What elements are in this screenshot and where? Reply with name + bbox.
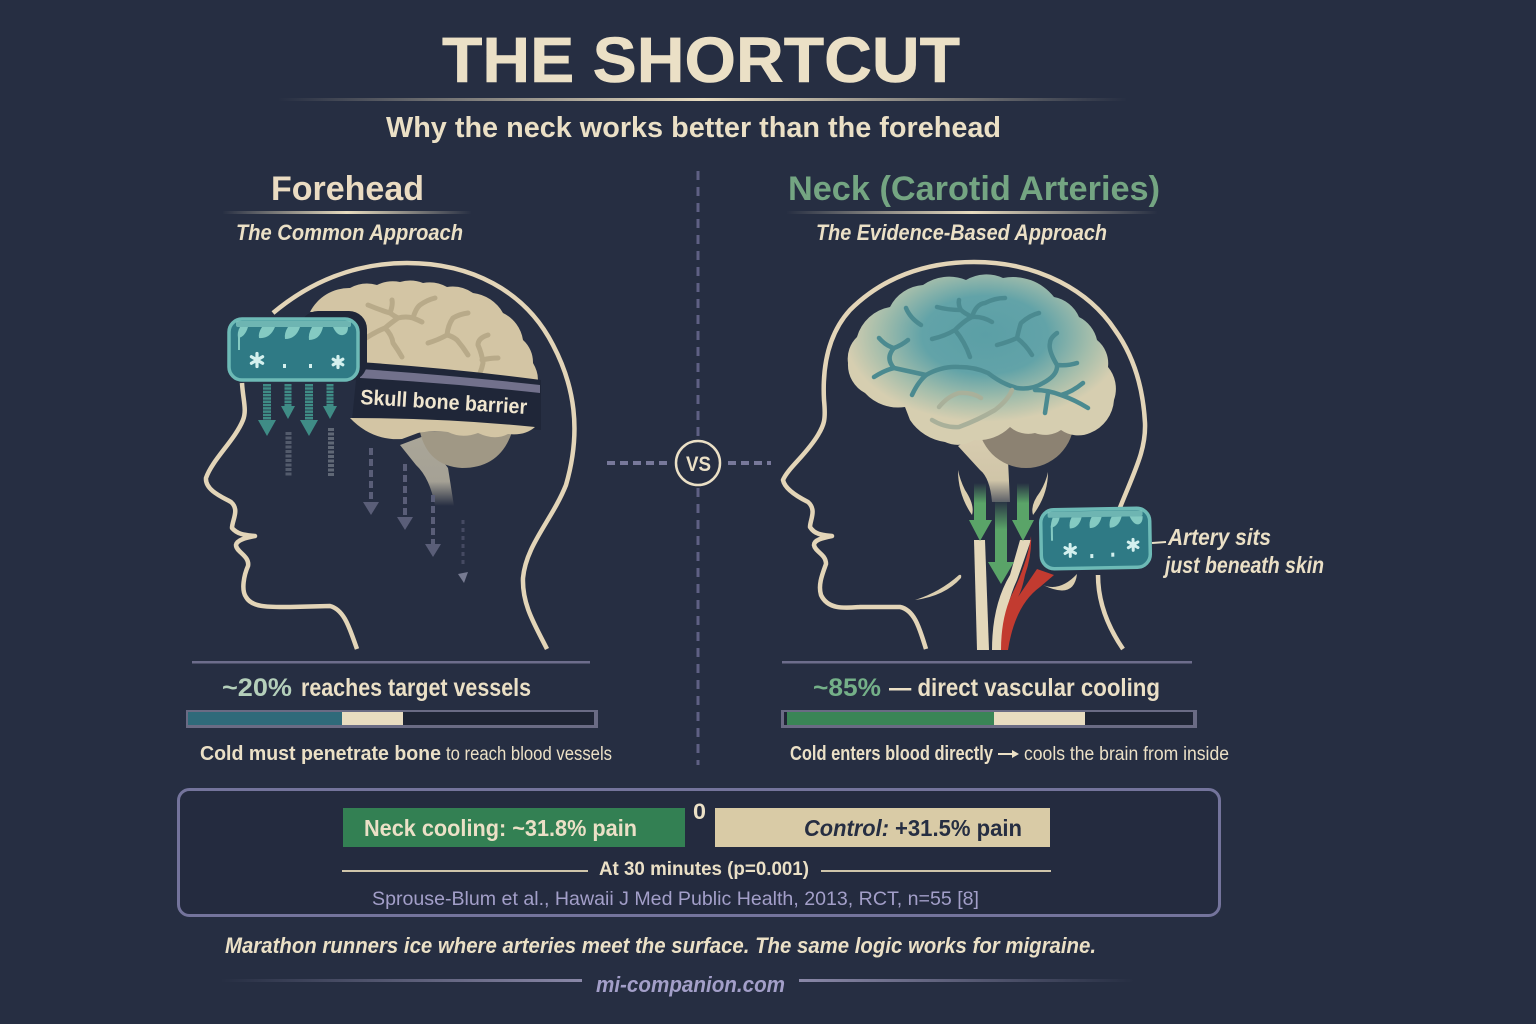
- result bar: control: [715, 808, 1050, 847]
- footer: [220, 972, 1135, 997]
- skull bone barrier: [350, 362, 541, 439]
- footer: mi-companion.com: [596, 972, 785, 997]
- note: neck: [790, 743, 1229, 765]
- zero marker: 0: [693, 799, 706, 824]
- ice pack: [1041, 508, 1151, 569]
- heading: forehead: Forehead: [271, 170, 424, 208]
- note: neck: cools the brain from inside: [1024, 744, 1229, 765]
- heading: neck: Neck (Carotid Arteries): [788, 170, 1160, 208]
- cerebellum and stem: [958, 372, 1074, 502]
- note: forehead: [200, 743, 612, 765]
- result bar: control: +31.5% pain: [895, 815, 1022, 841]
- carotid vessels: [974, 536, 1054, 650]
- subheading: evidence-based approach: The Evidence-Based Approach: [816, 220, 1107, 245]
- cooled brain: [848, 274, 1116, 445]
- stat: 85 percent: [782, 661, 1192, 702]
- stat: 85 percent: — direct vascular cooling: [889, 674, 1160, 702]
- artery callout: Artery sits: [1167, 524, 1271, 550]
- shoulder and jaw curves: [915, 470, 1077, 600]
- stat: 20 percent: reaches target vessels: [301, 674, 531, 702]
- progress bar: 85 percent: [781, 710, 1197, 728]
- subheading: common approach: The Common Approach: [236, 220, 463, 245]
- stat: 85 percent: ~85%: [813, 674, 881, 702]
- head outline: [783, 262, 1145, 649]
- head outline: [206, 263, 574, 649]
- note: forehead: to reach blood vessels: [446, 744, 612, 765]
- result bar: control: Control:: [804, 815, 889, 841]
- note: neck: Cold enters blood directly: [790, 743, 994, 765]
- closing statement: Marathon runners ice where arteries meet the surface. The same logic works for migraine.: [225, 933, 1096, 958]
- skull bone barrier: Skull bone barrier: [360, 386, 528, 419]
- result bar: neck cooling: Neck cooling: ~31.8% pain: [364, 815, 637, 841]
- faded cold trails: [288, 428, 331, 476]
- vs divider: VS: [686, 453, 711, 476]
- artery callout: just beneath skin: [1162, 552, 1324, 578]
- result bar: neck cooling: [343, 808, 685, 847]
- green cooling arrows: [969, 483, 1034, 584]
- blocked dashed arrows: [363, 448, 468, 583]
- artery callout: [1152, 524, 1324, 578]
- brain: [310, 281, 538, 385]
- vs divider: [607, 171, 771, 765]
- illustration: head with forehead cooling: [206, 263, 574, 649]
- illustration: head with neck cooling: [783, 262, 1324, 650]
- ice pack: [229, 311, 367, 381]
- panel: forehead: [186, 170, 612, 765]
- panel: trial results: [178, 790, 1220, 916]
- brain folds: [874, 298, 1088, 413]
- citation: Sprouse-Blum et al., Hawaii J Med Public Health, 2013, RCT, n=55 [8]: [372, 888, 979, 910]
- stat: 20 percent: [192, 661, 590, 702]
- note: forehead: Cold must penetrate bone: [200, 743, 441, 765]
- panel: neck: [781, 170, 1324, 765]
- brain folds: [363, 298, 498, 373]
- title: THE SHORTCUT: [442, 24, 960, 96]
- progress bar: 20 percent: [186, 710, 598, 728]
- timepoint label: At 30 minutes (p=0.001): [599, 859, 809, 880]
- subtitle: Why the neck works better than the forehead: [386, 112, 1001, 144]
- cold arrows through skull: [258, 384, 337, 436]
- stat: 20 percent: ~20%: [222, 674, 292, 702]
- cerebellum and stem: [400, 432, 512, 506]
